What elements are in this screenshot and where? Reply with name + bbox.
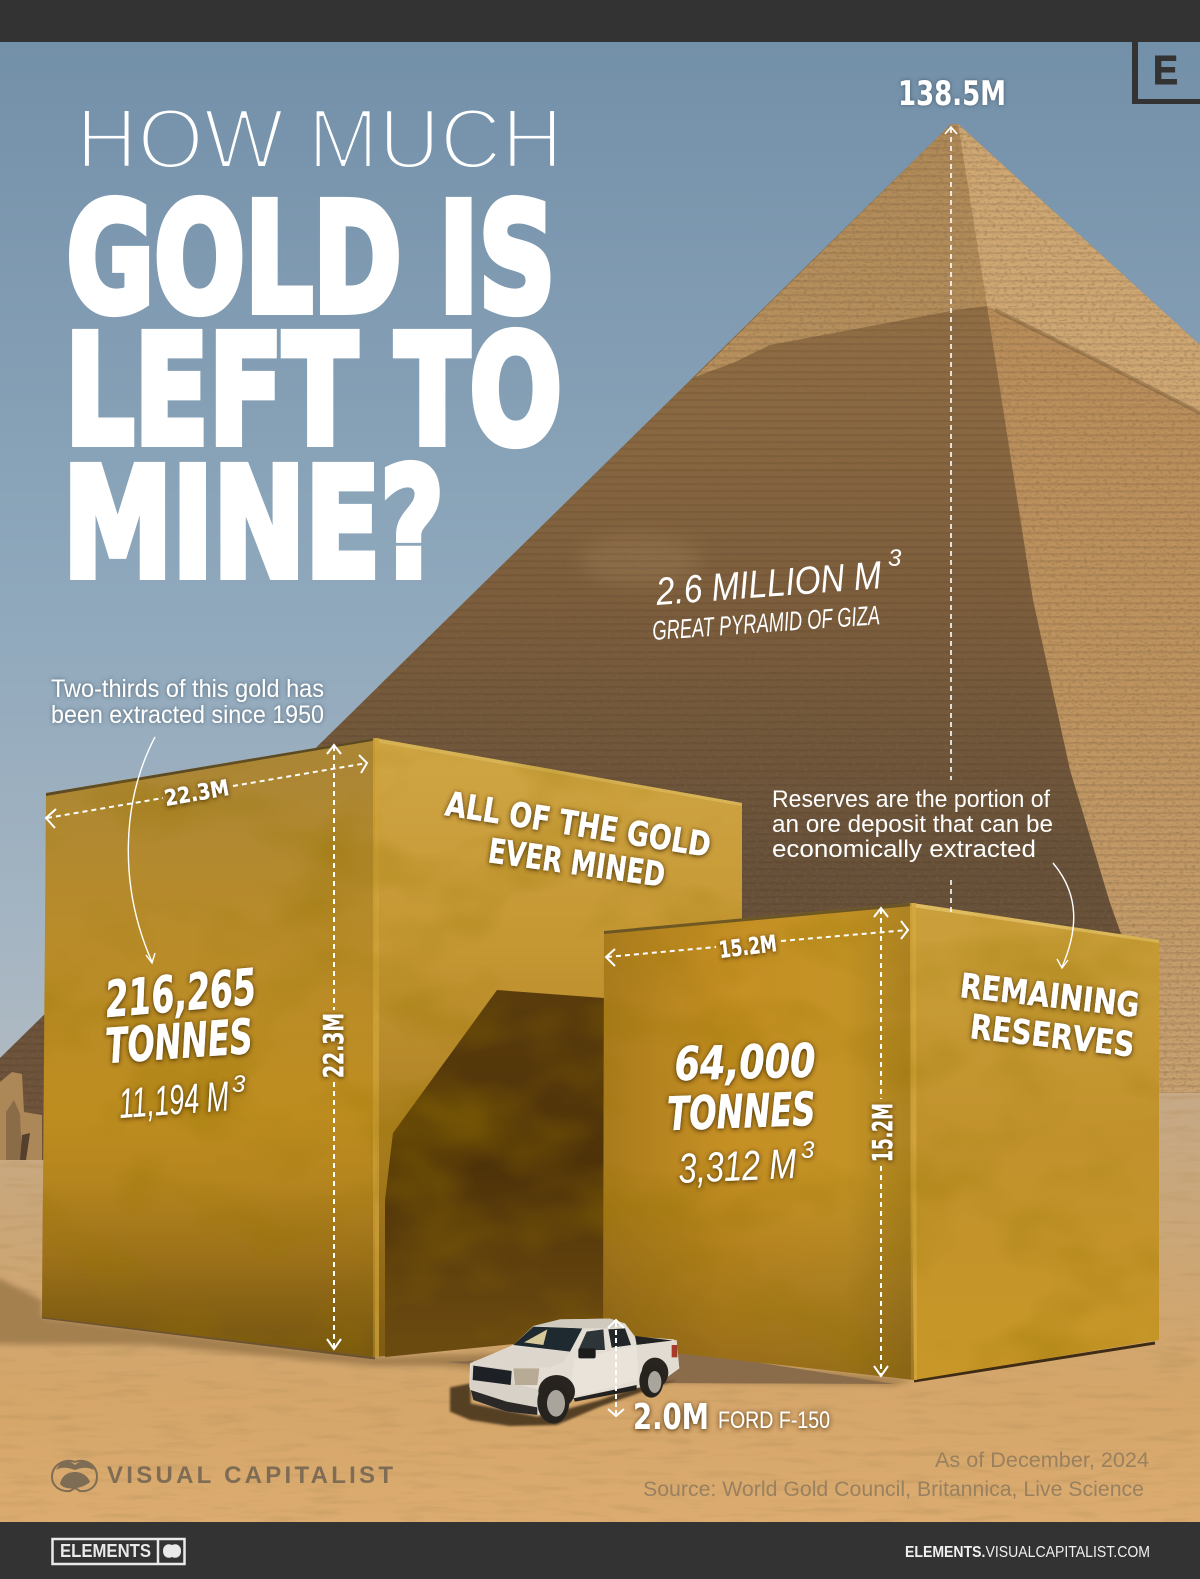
pyramid height arrow: [945, 127, 957, 912]
height label: 15.2M: [866, 1103, 899, 1162]
pickup truck: Ford F-150: [450, 1319, 679, 1426]
height label: 22.3M: [317, 1013, 350, 1078]
badge wordmark: ELEMENTS: [60, 1541, 151, 1561]
icon: mask logo small: [163, 1544, 181, 1558]
cube right face: [375, 738, 742, 1357]
height arrow: small cube: [874, 908, 888, 1376]
sky background: [0, 42, 1200, 1172]
as-of date and sources: [643, 1449, 1149, 1501]
cube title line 1: REMAINING: [958, 966, 1141, 1026]
cube front face: [603, 903, 914, 1380]
arrow: callout to remaining reserves: [1053, 863, 1074, 968]
height arrow: large cube: [327, 745, 341, 1349]
footer bar: [0, 1522, 1200, 1579]
tonnage unit: TONNES: [104, 1009, 254, 1075]
title line: How much: HOW MUCH: [76, 92, 563, 187]
truck height: 2.0M: [633, 1397, 709, 1438]
pyramid volume label: [651, 545, 902, 646]
icon: mask logo: [52, 1461, 97, 1491]
callout: two-thirds extracted since 1950: Two-thirds of this gold has: [51, 675, 324, 703]
volume: small cube: 3: [801, 1137, 815, 1164]
small distant sphinx-like ruin: [0, 1072, 42, 1160]
title: [63, 92, 563, 612]
cube shadows on the sand: [0, 1274, 1155, 1385]
icon: Elements E logo: E: [1153, 47, 1178, 93]
arrow: callout to 216,265 tonnes: [128, 737, 155, 963]
Elements logo badge: [52, 1539, 184, 1564]
pyramid of Giza: [0, 124, 1200, 1170]
brand wordmark: VISUAL CAPITALIST: [107, 1462, 393, 1489]
icon: Elements E logo: [1132, 42, 1200, 104]
as-of date and sources: Source: World Gold Council, Britannica, Live Science: [643, 1478, 1144, 1501]
Visual Capitalist logo: [52, 1461, 393, 1491]
website URL: ELEMENTS.VISUALCAPITALIST.COM: [905, 1544, 1150, 1561]
cube right face: [912, 903, 1159, 1380]
title line: Mine?: MINE?: [63, 436, 444, 612]
callout: reserves definition: economically extracted: [772, 836, 1036, 863]
volume: large cube: [117, 1071, 246, 1127]
width label: 15.2M: [718, 931, 778, 964]
pyramid height label: 138.5M: [898, 74, 1006, 114]
pyramid volume: 2.6 MILLION M: [654, 554, 883, 614]
width arrow: small cube: [606, 921, 908, 966]
width label: 22.3M: [163, 776, 231, 812]
callout: reserves definition: Reserves are the portion of: [772, 786, 1050, 813]
volume: small cube: 3,312 M: [677, 1140, 797, 1192]
volume: large cube: 3: [232, 1071, 246, 1098]
shadow cast by the smaller cube: [385, 990, 604, 1357]
callout: two-thirds extracted since 1950: [51, 675, 324, 729]
gold cube: remaining reserves: [600, 900, 1162, 1382]
volume: large cube: 11,194 M: [117, 1072, 230, 1127]
gold cube: all gold ever mined: [40, 735, 745, 1360]
cube title line 2: RESERVES: [968, 1007, 1136, 1066]
tonnage unit: TONNES: [666, 1082, 816, 1141]
pyramid name: GREAT PYRAMID OF GIZA: [651, 600, 881, 646]
cube title line 1: ALL OF THE GOLD: [443, 784, 714, 866]
callout: reserves definition: an ore deposit that can be: [772, 811, 1053, 838]
labels: large cube: [103, 776, 714, 1078]
cube front face: [42, 738, 375, 1357]
as-of date and sources: As of December, 2024: [935, 1449, 1149, 1472]
labels: small cube: [666, 931, 1141, 1162]
title line: Gold is: GOLD IS: [66, 171, 556, 347]
tonnage value: 64,000: [674, 1033, 816, 1091]
truck label: [633, 1397, 830, 1438]
sand ground: [0, 1093, 1200, 1523]
callout: reserves definition: [772, 786, 1053, 863]
volume exponent: 3: [888, 545, 902, 572]
cube title line 2: EVER MINED: [486, 831, 668, 896]
tonnage value: 216,265: [103, 958, 258, 1029]
truck name: FORD F-150: [718, 1407, 830, 1434]
title line: Left to: LEFT TO: [65, 303, 562, 479]
top bar: [0, 0, 1200, 42]
width arrow: large cube: [46, 755, 367, 828]
callout: two-thirds extracted since 1950: been extracted since 1950: [51, 701, 324, 729]
truck height arrow: [608, 1320, 624, 1416]
